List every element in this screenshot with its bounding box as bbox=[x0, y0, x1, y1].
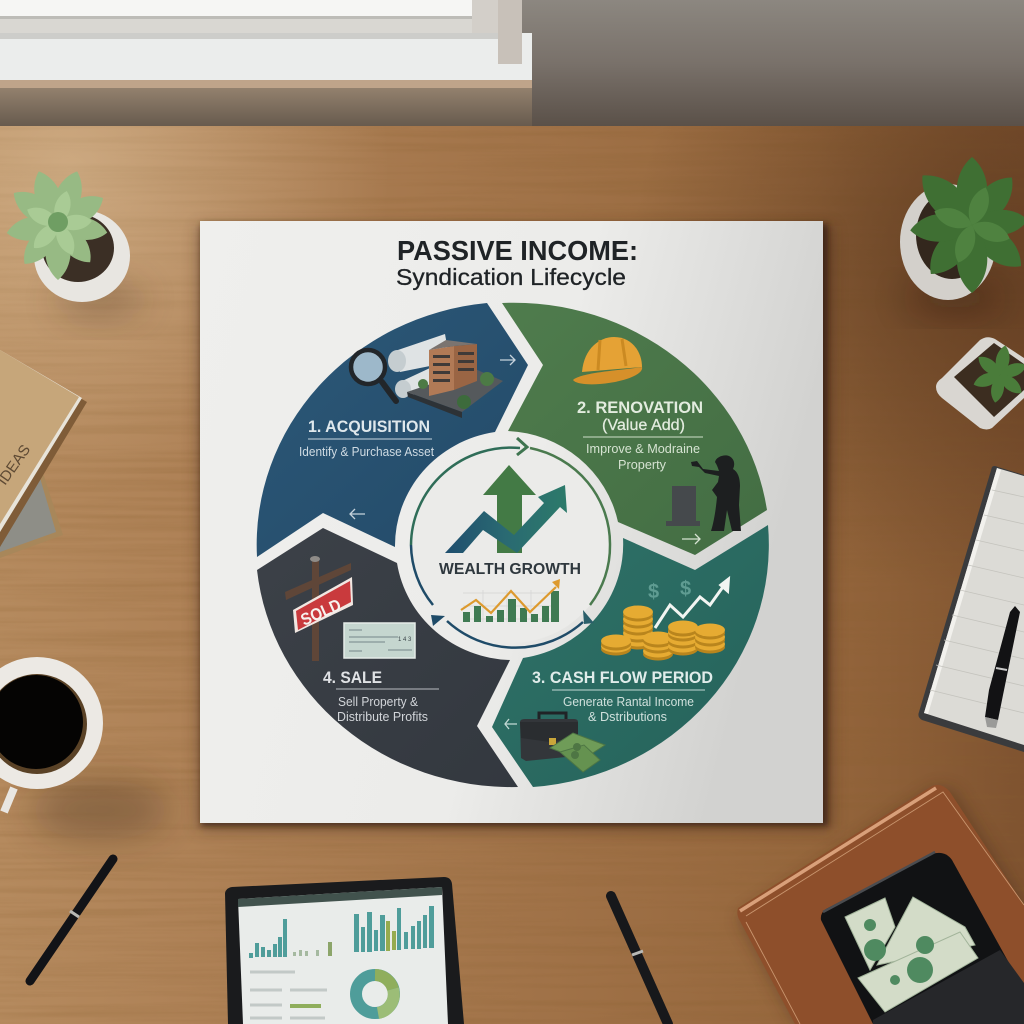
icon: dollar signs bbox=[648, 578, 691, 603]
icon: gold coin stacks bbox=[601, 606, 725, 660]
icon: sold sign bbox=[285, 556, 353, 661]
title: PASSIVE INCOME: bbox=[397, 235, 638, 266]
icon: growth arrow bbox=[655, 584, 725, 628]
dashboard donut bbox=[356, 975, 394, 1013]
plant: top right succulent bbox=[900, 157, 1024, 312]
ring arrowheads bbox=[431, 438, 594, 626]
cycle ring bbox=[411, 448, 610, 648]
icon: wall block bbox=[666, 486, 700, 526]
dashboard bars bbox=[249, 906, 434, 958]
icon: worker silhouette bbox=[691, 455, 741, 531]
label: wealth growth: WEALTH GROWTH bbox=[439, 561, 581, 578]
segment 4: sale bbox=[257, 528, 518, 787]
description: acquisition: Identify & Purchase Asset bbox=[299, 445, 434, 459]
segment 2: renovation bbox=[502, 303, 767, 555]
arrow left bbox=[350, 509, 365, 519]
black tray bbox=[821, 853, 1024, 1024]
segment 2: renovation: (Value Add) bbox=[602, 417, 685, 434]
title bbox=[396, 235, 638, 290]
arrow right bbox=[500, 355, 515, 365]
segment 4: sale: Distribute Profits bbox=[337, 710, 428, 724]
segment 2: renovation: Property bbox=[618, 458, 667, 472]
banknotes bbox=[845, 897, 978, 1012]
segment 3: cash flow bbox=[492, 525, 769, 787]
coffee cup bbox=[0, 657, 103, 812]
segment 1: acquisition bbox=[257, 303, 528, 557]
icon: check: 1 4 3 bbox=[398, 637, 412, 643]
icon: apartment building bbox=[407, 340, 503, 418]
icon: blueprint rolls bbox=[388, 334, 450, 398]
arrow right bbox=[682, 534, 700, 544]
heading: acquisition: 1. ACQUISITION bbox=[308, 418, 430, 436]
heading: renovation: 2. RENOVATION bbox=[577, 399, 703, 417]
subtitle: Syndication Lifecycle bbox=[396, 264, 626, 290]
icon: briefcase bbox=[520, 713, 578, 761]
icon: zigzag growth arrow bbox=[445, 485, 567, 553]
books stack with IDEAS cover bbox=[0, 350, 87, 558]
leather folio with cash tray bbox=[737, 785, 1024, 1024]
notebook and pen bbox=[918, 466, 1024, 752]
pen: lower left bbox=[30, 859, 113, 981]
description: renovation: Improve & Modraine bbox=[586, 442, 700, 456]
plant: small square pot bbox=[936, 337, 1024, 430]
mini bar chart bbox=[461, 579, 560, 622]
center hub: wealth growth bbox=[411, 438, 611, 648]
icon: cash bills bbox=[550, 733, 605, 772]
paper shadow bbox=[198, 224, 832, 830]
description: sale: Sell Property & bbox=[338, 695, 419, 709]
tablet with dashboard bbox=[225, 877, 464, 1024]
icon: hard hat bbox=[573, 337, 642, 384]
wallet flap bbox=[873, 950, 1024, 1024]
pen on notebook bbox=[985, 606, 1020, 728]
icon: up arrow bbox=[483, 465, 536, 553]
background: window and wall bbox=[0, 0, 1024, 127]
dashboard text rows bbox=[250, 972, 327, 1018]
arrow left bbox=[505, 719, 517, 729]
heading: cash flow period: 3. CASH FLOW PERIOD bbox=[532, 669, 713, 687]
segment 3: cash flow: & Dstributions bbox=[588, 710, 667, 724]
pen: lower center bbox=[611, 896, 668, 1024]
icon: dollar signs: $ bbox=[648, 581, 659, 603]
icon: check bbox=[344, 623, 415, 658]
icon: sold sign: SOLD bbox=[298, 595, 344, 630]
poster panel bbox=[200, 221, 823, 823]
icon: magnifying glass bbox=[351, 350, 396, 401]
plant: top left succulent bbox=[5, 167, 145, 318]
heading: sale: 4. SALE bbox=[323, 669, 382, 687]
description: cash flow: Generate Rantal Income bbox=[563, 695, 694, 709]
icon: dollar signs: $ bbox=[680, 578, 691, 600]
